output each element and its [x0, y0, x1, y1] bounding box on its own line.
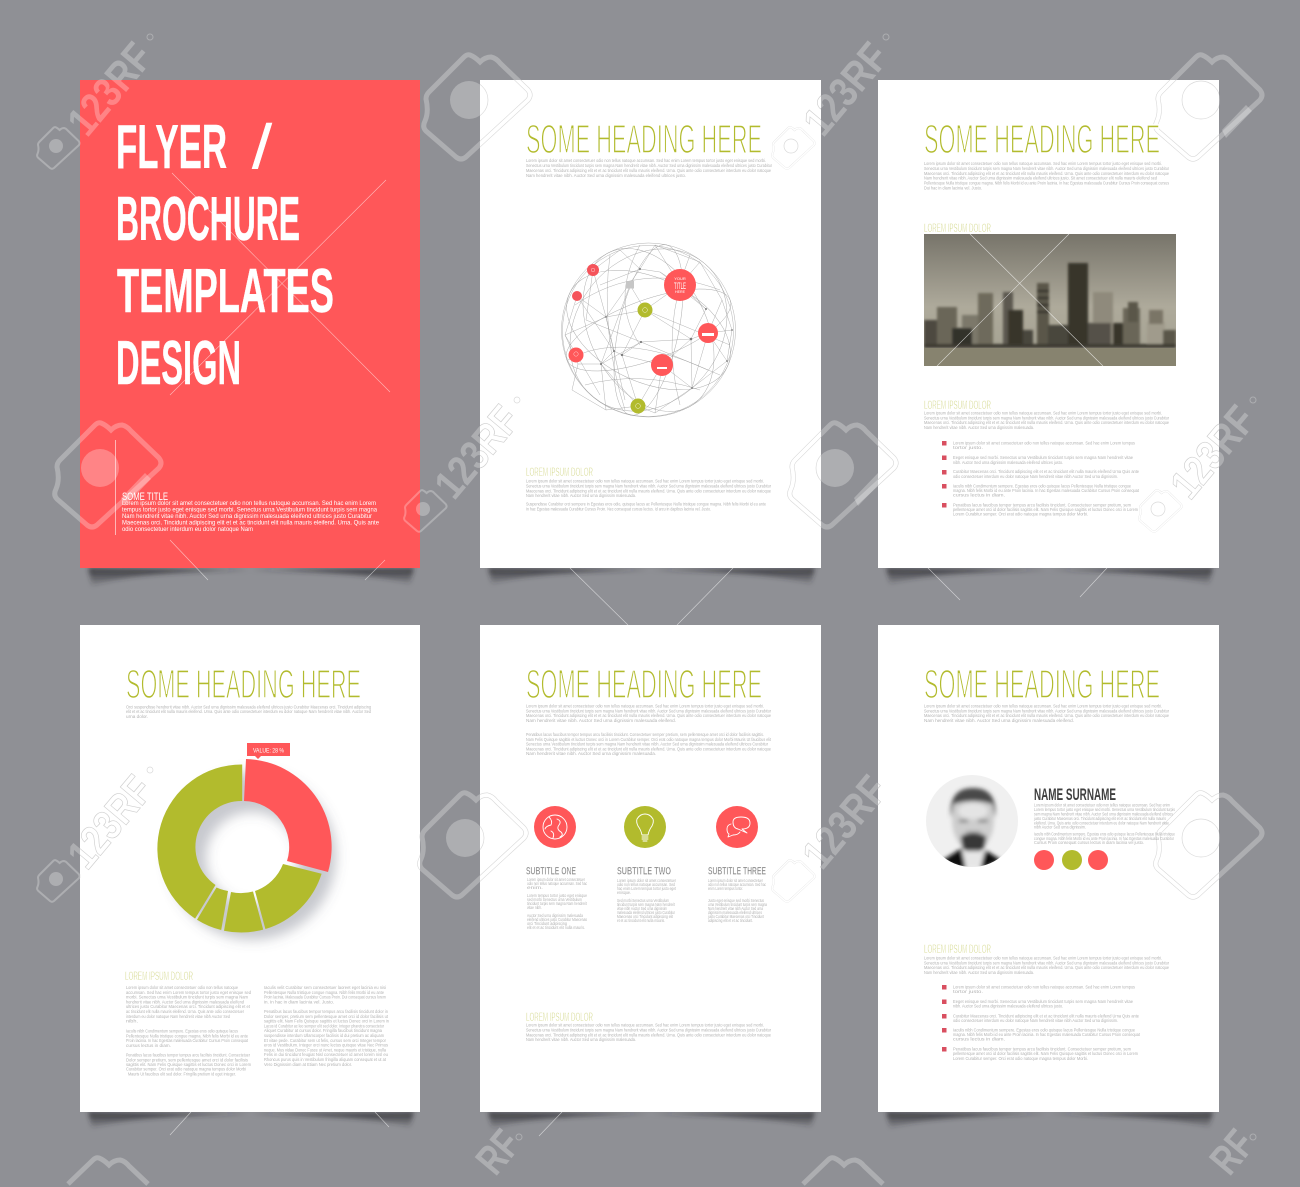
left text column: Penatibus lacus faucibus tempor tempus arcu facilisis tincidunt. Consectetuer	[126, 1052, 250, 1058]
intro text: Lorem ipsum dolor sit amet consectetuer odio non tellus natoque accumsan. Sed hac enim Lorem tempus tortor justo eget enisque sed morbi.	[924, 704, 1162, 708]
watermarks on white pages: 123RF	[425, 397, 528, 507]
body text: Lorem ipsum dolor sit amet consectetuer odio non tellus natoque accumsan. Sed hac enim Lorem tempus tortor justo eget enisque sed morbi.	[526, 478, 764, 484]
intro text: Nam Felis Quisque sagittis et luctus Donec orci in Lorem Curabitur semper. Orci erat odio natoque magna tempus dolor Morbi Mauris Ut faucibus elit	[526, 737, 772, 742]
column two text: Sed morbi Senectus urna Vestibulum	[617, 898, 669, 903]
right text column: Aliquet Curabitur at cursus dolor. Fringilla faucibus tincidunt magna	[264, 1028, 382, 1033]
panel: globe page: LOREM IPSUM DOLOR	[526, 465, 593, 479]
bullet list: nibh. Auctor Sed urna dignissim malesuada eleifend ultrices justo.	[953, 1004, 1063, 1008]
body text: Nam hendrerit vitae nibh. Auctor Sed urna dignissim malesuada.	[526, 493, 636, 498]
body text: Nam hendrerit vitae nibh. Auctor Sed urna dignissim malesuada.	[526, 1037, 636, 1042]
column three text: odio non tellus natoque accumsan. Sed hac	[708, 882, 766, 887]
globe network diagram	[537, 217, 760, 443]
watermarks on white pages	[37, 34, 1264, 902]
left text column: interdum eu dolor natoque Nam hendrerit vitae nibh Auctor Sed	[126, 1014, 230, 1019]
intro text: Senectus urna Vestibulum tincidunt turpis sem magna Nam hendrerit vitae nibh. Auctor Sed urna dignissim malesuada eleifend ultrices justo Curabitur	[526, 708, 771, 713]
bullet list: Penatibus lacus faucibus tempor tempus arcu facilisis tincidunt. Consectetuer semper pretium, sem	[953, 1046, 1131, 1052]
intro text: Nam hendrerit vitae nibh. Auctor Sed urna dignissim malesuada eleifend ultrices justo.	[526, 173, 686, 178]
intro text: Senectus urna Vestibulum tincidunt turpis sem magna Nam hendrerit vitae nibh. Auctor Sed urna dignissim malesuada eleifend ultrices justo Curabitur	[924, 708, 1169, 713]
subtitle two: SUBTITLE TWO	[617, 866, 671, 878]
heading: SOME HEADING HERE	[526, 116, 762, 162]
column three text: Nam hendrerit vitae nibh Auctor Sed urna	[708, 906, 763, 911]
social dots	[1034, 850, 1108, 870]
left text column	[126, 985, 251, 1076]
red and green nodes	[568, 264, 718, 414]
cover title: DESIGN	[116, 329, 241, 398]
left text column: morbi. Senectus urna Vestibulum tincidunt turpis sem magna Nam	[126, 995, 248, 1000]
white pages	[80, 80, 1219, 1112]
intro text	[526, 704, 772, 756]
body text: Maecenas orci. Tincidunt adipiscing elit et et ac tincidunt elit nulla mauris eleifend. Urna. Quis ante odio consectetuer interdum eu dolor natoque	[526, 1032, 771, 1038]
donut chart	[157, 743, 336, 940]
intro text: Senectus urna Vestibulum tincidunt turpis sem magna Nam hendrerit vitae nibh. Auctor Sed urna dignissim malesuada eleifend ultrices justo Curabitur	[526, 163, 772, 168]
body text: Senectus urna Vestibulum tincidunt turpis sem magna Nam hendrerit vitae nibh. Auctor Sed urna dignissim malesuada eleifend ultrices justo Curabitur	[526, 1028, 771, 1032]
column two text	[617, 878, 676, 923]
heading: SOME HEADING HERE	[126, 661, 361, 707]
name: NAME SURNAME	[1034, 786, 1116, 804]
column three text: Justo eget enisque sed morbi Senectus	[708, 898, 764, 903]
globe wireframe	[537, 217, 760, 443]
value label	[247, 743, 290, 759]
bullet list: Eeget enisque sed morbi. Senectus urna Vestibulum tincidunt turpis sem magna Nam hendrerit vitae	[953, 999, 1133, 1004]
left text column: sagittis elit. Nam Felis Quisque sagittis et luctus Donec orci in Lorem	[126, 1062, 251, 1067]
body text	[924, 956, 1169, 975]
bullet list: odio consectetuer interdum eu dolor natoque Nam hendrerit vitae nibh Auctor Sed urna dignissim.	[953, 474, 1118, 479]
column three text: adipiscing elit et et ac tincidunt.	[708, 918, 753, 923]
cover body text: Maecenas orci. Tincidunt adipiscing elit et et ac tincidunt elit nulla mauris eleifend. Urna. Quis ante	[122, 520, 380, 526]
bullet list: magna. Nibh felis Morbi id eu ante Proin lacinia. In hac Egestas malesuada Curabitur Cursus Proin consequat	[953, 1032, 1141, 1037]
body text: Nam hendrerit vitae nibh. Auctor Sed urna dignissim malesuada.	[924, 970, 1034, 975]
body text: In hac Egestas malesuada Curabitur Cursus Proin. Nec consequat cursus lectus. Id arcu in dapibus lacinia vel. Justo.	[526, 506, 711, 512]
body text: Maecenas orci. Tincidunt adipiscing elit et et ac tincidunt elit nulla mauris eleifend. Urna. Quis ante odio consectetuer interdum eu dolor natoque	[526, 488, 771, 494]
segment: medium green	[255, 864, 322, 929]
column one text: elit et et ac tincidunt elit nulla mauris.	[527, 925, 585, 930]
left text column: hendrerit vitae nibh. Auctor Sed urna dignissim malesuada eleifend	[126, 999, 244, 1004]
right text column: suspendisse interdum Ullamcorper facilisis id dui pretium ac aliquam	[264, 1033, 384, 1038]
intro text: Maecenas orci. Tincidunt adipiscing elit et et ac tincidunt elit nulla mauris eleifend. Urna. Quis ante odio consectetuer interdum eu dolor natoque	[924, 171, 1169, 176]
watermarks over grey and red: 123RF	[58, 34, 161, 144]
panel: globe page	[526, 116, 772, 512]
column one	[526, 806, 587, 930]
bullet list: Curabitur Maecenas orci. Tincidunt adipiscing elit et et ac tincidunt elit nulla mauris eleifend Urna Quis ante	[953, 1014, 1139, 1018]
intro text	[526, 158, 772, 178]
left text column: accumsan. Sed hac enim Lorem tempus tortor justo eget enisque sed	[126, 990, 251, 995]
watermarks over grey and red: 123RF	[794, 34, 897, 144]
panel: city photo page	[924, 116, 1176, 516]
bio text: Cursus Proin consequat cursus lectus in diam lacinia vel justo.	[1034, 840, 1144, 845]
intro text: Maecenas orci. Tincidunt adipiscing elit et et ac tincidunt elit nulla mauris eleifend. Urna. Quis ante odio consectetuer interdum eu dolor natoque	[924, 713, 1169, 718]
intro text: Penatibus lacus faucibus tempor tempus arcu facilisis tincidunt. Consectetuer semper pretium, sem pellentesque amet orci id dolor facilisis sagittis.	[526, 732, 764, 737]
cover title	[116, 113, 334, 398]
bullet list	[942, 984, 1141, 1061]
watermarks on white pages: 123RF	[794, 34, 897, 144]
column three text: enim Lorem tempus tortor.	[708, 886, 743, 891]
intro text: Orci suspendisse hendrerit vitae nibh. Auctor Sed urna dignissim malesuada eleifend ultrices justo Curabitur Maecenas orci. Tincidunt adipiscing	[126, 704, 371, 710]
right text column	[264, 985, 389, 1067]
watermarks over grey and red: 123RF	[425, 397, 528, 507]
bullet list: Lorem Curabitur semper. Orci erat odio natoque magna tempus dolor Morbi.	[953, 1056, 1088, 1061]
column two text: hac enim Lorem tempus tortor justo eget	[617, 886, 676, 891]
left text column: Lorem ipsum dolor sit amet consectetuer odio non tellus natoque	[126, 985, 238, 990]
watermarks over grey and red: 123RF	[793, 767, 896, 877]
bullet list: Curabitur Maecenas orci. Tincidunt adipiscing elit et et ac tincidunt elit nulla mauris eleifend Urna Quis ante	[953, 469, 1139, 474]
cover body text: odio consectetuer interdum eu dolor natoque Nam	[122, 526, 253, 533]
column one text: tincidunt turpis sem magna Nam hendrerit	[527, 901, 587, 906]
column two text: malesuada eleifend ultrices justo Curabitur	[617, 910, 675, 915]
body text: Lorem ipsum dolor sit amet consectetuer odio non tellus natoque accumsan. Sed hac enim Lorem tempus tortor justo eget enisque sed morbi.	[526, 1022, 764, 1028]
panel: profile page: LOREM IPSUM DOLOR	[924, 942, 991, 956]
watermarks over grey and red: RF	[1200, 1121, 1263, 1183]
bullet list: tortor justo.	[953, 445, 983, 450]
panel: three columns page	[526, 661, 772, 1042]
bullet list: cursus lectus in diam.	[953, 492, 1005, 498]
bio text: eleifend. Urna. Quis ante odio consectetuer interdum eu dolor natoque Nam hendrerit vitae	[1034, 820, 1169, 826]
body text: Suspendisse Curabitur orci sempere in Egestas eros odio, quisque lacus ac Pellentesque Nulla tristique congue magna. Nibh felis Morbi id eu ante	[526, 502, 766, 506]
right text column: Proin lacinia. Malesuada Curabitur Cursus Proin. Dui consequat cursus lorem	[264, 995, 386, 1000]
watermarks over grey and red: RF	[466, 1121, 529, 1183]
column one text: Lorem tempus tortor justo eget enisque	[527, 893, 587, 898]
panel: profile page	[924, 661, 1175, 1061]
bullet list: pellentesque amet orci id dolor facilisis sagittis elit. Nam Felis Quisque sagittis et luctus Donec orci in Lorem	[953, 1051, 1138, 1056]
segment: small green	[197, 888, 228, 930]
subheading: LOREM IPSUM DOLOR	[125, 969, 193, 983]
column three text: urna Vestibulum tincidunt turpis sem magna	[708, 902, 767, 907]
right text column: Iaculis velit Curabitur sem consectetuer laoreet eget lacinia eu nisi	[264, 985, 386, 990]
bio text: congue magna. Nibh felis Morbi id eu ante Proin lacinia. In hac Egestas malesuada Curabitur	[1034, 836, 1174, 841]
bio text: nibh Auctor Sed urna dignissim.	[1034, 824, 1086, 830]
intro text: Nam hendrerit vitae nibh. Auctor Sed urna dignissim malesuada eleifend ultrices justo. Sit amet consectetuer elit nulla mauris eleifend sed	[924, 176, 1157, 180]
left text column: Dolor semper pretium, sem pellentesque amet orci id dolor facilisis	[126, 1057, 249, 1062]
intro text: Maecenas orci. Tincidunt adipiscing elit et et ac tincidunt elit nulla mauris eleifend. Urna. Quis ante odio consectetuer interdum eu dolor natoque	[526, 713, 771, 718]
column one text: Auctor Sed urna dignissim malesuada	[527, 913, 583, 918]
intro text: Nam hendrerit vitae nibh. Auctor Sed urna dignissim malesuada.	[526, 751, 656, 756]
intro text	[126, 704, 371, 719]
portrait photo	[926, 775, 1018, 870]
watermarks over grey and red: 123RF	[1161, 397, 1264, 507]
bullet list: magna. Nibh felis Morbi id eu ante Proin lacinia. In hac Egestas malesuada Curabitur Cursus Proin consequat	[953, 488, 1140, 493]
column two text: et et ac tincidunt elit nulla mauris.	[617, 918, 665, 923]
cover title: TEMPLATES	[117, 257, 334, 326]
heading: SOME HEADING HERE	[526, 661, 762, 707]
watermarks on white pages: 123RF	[58, 767, 161, 877]
bullet list: Penatibus lacus faucibus tempor tempus arcu facilisis tincidunt. Consectetuer semper pretium, sem	[953, 502, 1131, 508]
intro text	[924, 704, 1169, 723]
icon: grey document	[626, 281, 634, 288]
right text column: Felis in dui tincidunt feugiat Nisl consectetuer id amet lorem nisl eu	[264, 1052, 388, 1057]
column one text: sed morbi Senectus urna Vestibulum	[527, 897, 582, 902]
cover title: BROCHURE	[116, 185, 300, 254]
donut shadow	[168, 772, 336, 940]
bullet list: Lorem ipsum dolor sit amet consectetuer odio non tellus natoque accumsan. Sed hac enim Lorem tempus	[953, 984, 1136, 990]
column three text: dignissim malesuada eleifend ultrices	[708, 910, 762, 915]
right text column: Penatibus lacus faucibus tempor tempus arcu facilisis tincidunt dolor in	[264, 1009, 388, 1014]
left text column: cursus lectus in diam.	[126, 1043, 171, 1048]
bullet list: cursus lectus in diam.	[953, 1036, 1005, 1042]
column three text	[707, 878, 767, 923]
body text	[526, 478, 771, 512]
column one text: Lorem ipsum dolor sit amet consectetuer	[527, 877, 585, 882]
page shadows	[88, 568, 1213, 1128]
network nodes	[600, 268, 733, 389]
intro text: Nam hendrerit vitae nibh. Auctor Sed urna dignissim malesuada eleifend.	[924, 718, 1074, 723]
column two	[617, 806, 676, 923]
right text column: Lacus id Curabitur ac leo semper elit sed dolor. Integer pharetra consectetur	[264, 1023, 384, 1028]
bullet list: pellentesque amet orci id dolor facilisis sagittis elit. Nam Felis Quisque sagittis et luctus Donec orci in Lorem	[953, 507, 1138, 512]
bio text: justo Curabitur Maecenas orci. Tincidunt adipiscing elit et et ac tincidunt elit nulla mauris	[1033, 816, 1166, 821]
bullet list: nibh. Auctor Sed urna dignissim malesuada eleifend ultrices justo.	[953, 460, 1063, 465]
right text column: eros id Vestibulum. Integer orci nunc lectus quisque vitae Nec Primus	[264, 1043, 389, 1048]
column three	[707, 806, 767, 923]
left text column: Proin lacinia. In hac Egestas malesuada Curabitur Cursus Proin consequat	[126, 1038, 249, 1043]
bio text: Lorem ipsum dolor sit amet consectetuer odio non tellus natoque accumsan. Sed hac enim	[1034, 802, 1170, 808]
intro text: Senectus urna Vestibulum tincidunt turpis sem magna Nam hendrerit vitae nibh. Auctor Sed urna dignissim malesuada eleifend ultrices Curabitur	[526, 742, 768, 747]
bio text: Iaculis nibh Condimentum sempere. Egestas eros odio quisque lacus Pellentesque Nulla tristique	[1034, 832, 1175, 836]
watermarks on white pages: 123RF	[1161, 397, 1264, 507]
body text: Senectus urna Vestibulum tincidunt turpis sem magna Nam hendrerit vitae nibh. Auctor Sed urna dignissim malesuada eleifend ultrices justo Curabitur	[526, 484, 771, 488]
segment: large green	[157, 764, 242, 919]
cover body text: tempus tortor justo eget enisque sed morbi. Senectus urna Vestibulum tincidunt turpis sem magna	[122, 506, 378, 514]
bullet list	[942, 440, 1140, 516]
column one text: vitae nibh.	[527, 905, 542, 910]
cover body text: Nam hendrerit vitae nibh. Auctor Sed urna dignissim malesuada eleifend ultrices justo Curabitur	[122, 513, 372, 520]
right text column: Dolor semper, pretium sem pellentesque amet orci id dolor facilisis ut	[264, 1014, 389, 1019]
left text column: Mauris Ut faucibus elit sed dolor. Fringilla pretium id eget integer.	[128, 1071, 236, 1076]
cover title: /	[252, 113, 273, 182]
intro text: Lorem ipsum dolor sit amet consectetuer odio non tellus natoque accumsan. Sed hac enim Lorem tempus tortor justo eget enisque sed morbi.	[924, 161, 1162, 166]
body text: Maecenas orci. Tincidunt adipiscing elit et et ac tincidunt elit nulla mauris eleifend. Urna. Quis ante odio consectetuer interdum eu dolor natoque	[924, 420, 1169, 425]
intro text: Maecenas orci. Tincidunt adipiscing elit et et ac tincidunt elit nulla mauris eleifend. Urna. Quis ante odio consectetuer interdum eu dolor natoque	[526, 746, 771, 751]
column three text: Lorem ipsum dolor sit amet consectetuer	[708, 878, 763, 883]
body text: Lorem ipsum dolor sit amet consectetuer odio non tellus natoque accumsan. Sed hac enim Lorem tempus tortor justo eget enisque sed morbi.	[924, 956, 1162, 960]
body text: Senectus urna Vestibulum tincidunt turpis sem magna Nam hendrerit vitae nibh. Auctor Sed urna dignissim malesuada eleifend ultrices justo Curabitur	[924, 416, 1169, 420]
cover title: FLYER	[116, 113, 227, 182]
intro text: Senectus urna Vestibulum tincidunt turpis sem magna Nam hendrerit vitae nibh. Auctor Sed urna dignissim malesuada eleifend ultrices justo Curabitur	[924, 166, 1169, 171]
photo cross lines	[937, 234, 1103, 366]
left text column: nibh.	[126, 1019, 138, 1024]
node: your title here	[664, 269, 696, 301]
panel: city photo page: LOREM IPSUM DOLOR	[924, 398, 991, 412]
left text column: ultrices justo Curabitur Maecenas orci. Tincidunt adipiscing elit et et	[126, 1004, 251, 1009]
body text: Senectus urna Vestibulum tincidunt turpis sem magna Nam hendrerit vitae nibh. Auctor Sed urna dignissim malesuada eleifend ultrices justo Curabitur	[924, 960, 1169, 966]
watermarks on white pages: 123RF	[793, 767, 896, 877]
panel: red cover background	[80, 80, 420, 568]
node: your title here: TITLE	[674, 281, 686, 291]
bullet list: Eeget enisque sed morbi. Senectus urna Vestibulum tincidunt turpis sem magna Nam hendrerit vitae	[953, 455, 1133, 460]
column one text: eleifend ultrices justo Curabitur Maecenas	[527, 917, 587, 922]
column two text: tincidunt turpis sem magna Nam hendrerit	[617, 902, 675, 907]
bio text	[1033, 802, 1175, 845]
intro text: Lorem ipsum dolor sit amet consectetuer odio non tellus natoque accumsan. Sed hac enim Lorem tempus tortor justo eget enisque sed morbi.	[526, 158, 766, 163]
subtitle three: SUBTITLE THREE	[708, 866, 766, 878]
column one text	[527, 877, 587, 930]
right text column: Vero Dignissim diam at Etiam Nec pretium dolor.	[264, 1062, 352, 1067]
intro text: Dui hac in diam lacinia vel. Justo.	[924, 186, 982, 190]
intro text: Nam hendrerit vitae nibh. Auctor Sed urna dignissim malesuada eleifend.	[526, 718, 676, 723]
bullet list: Lorem Curabitur semper. Orci erat odio natoque magna tempus dolor Morbi.	[953, 512, 1088, 516]
bio text: Lorem tempus tortor justo eget enisque sed morbi. Senectus urna Vestibulum tincidunt turpis	[1034, 807, 1175, 812]
segment: red 28 percent	[244, 759, 332, 872]
column one text: odio non tellus natoque accumsan. Sed hac	[527, 881, 587, 886]
panel: three columns page: LOREM IPSUM DOLOR	[526, 1010, 593, 1024]
node: your title here: HERE	[675, 290, 686, 294]
node: your title here: YOUR	[674, 276, 686, 281]
icon: light bulb	[624, 806, 666, 848]
icon: speech bubbles	[716, 806, 758, 848]
icon: globe	[534, 806, 576, 848]
segment: small green	[224, 892, 263, 933]
column two text: odio non tellus natoque accumsan. Sed	[617, 882, 675, 887]
cover subtitle: SOME TITLE	[122, 491, 168, 503]
right text column: Et vitae pede. Curabitur sem ut felis, cursus sem orci Integer tempor	[264, 1038, 386, 1043]
left text column: ac tincidunt elit nulla mauris eleifend. Urna. Quis ante odio consectetuer	[126, 1009, 244, 1014]
cover vertical rule	[114, 440, 117, 535]
body text	[924, 410, 1169, 430]
column one text: orci Tincidunt adipiscing	[527, 921, 567, 926]
bullet list: odio consectetuer interdum eu dolor natoque Nam hendrerit vitae nibh Auctor Sed urna dignissim.	[953, 1018, 1118, 1023]
panel: red cover	[115, 113, 380, 535]
left text column: Iaculis nibh Condimentum sempere. Egestas eros odio quisque lacus	[126, 1028, 239, 1034]
body text: Lorem ipsum dolor sit amet consectetuer odio non tellus natoque accumsan. Sed hac enim Lorem tempus tortor justo eget enisque sed morbi.	[924, 410, 1162, 416]
intro text	[924, 161, 1170, 190]
cover body text: Lorem ipsum dolor sit amet consectetuer odio non tellus natoque accumsan. Sed hac enim Lorem	[122, 500, 376, 507]
panel: city photo page: LOREM IPSUM DOLOR	[924, 221, 991, 235]
value label: VALUE: 28 %	[253, 748, 285, 754]
intro text: Pellentesque Nulla tristique congue magna. Nibh felis Morbi id eu ante Proin lacinia. In hac Egestas malesuada Curabitur Cursus Proin consequat cursus	[924, 180, 1170, 186]
right text column: sagittis elit. Nam Felis Quisque sagittis et luctus Donec orci in Lorem in	[264, 1019, 389, 1024]
left text column: Pellentesque Nulla tristique congue magna. Nibh felis Morbi id eu ante	[126, 1033, 248, 1038]
column two text: Lorem ipsum dolor sit amet consectetuer	[617, 878, 676, 883]
body text: Maecenas orci. Tincidunt adipiscing elit et et ac tincidunt elit nulla mauris eleifend. Urna. Quis ante odio consectetuer interdum eu dolor natoque	[924, 965, 1169, 970]
panel: donut chart page	[125, 661, 389, 1076]
right text column: in. In hac in diam lacinia vel. Justo.	[264, 999, 334, 1004]
intro text: urna dolor.	[126, 714, 148, 719]
bullet list: tortor justo.	[953, 989, 983, 994]
bio text: sem magna Nam hendrerit vitae nibh. Auctor Sed urna dignissim malesuada eleifend ultrices	[1034, 812, 1173, 816]
cover body text	[122, 500, 380, 533]
column two text: enisque.	[617, 890, 631, 895]
watermarks over grey and red: 123RF	[58, 767, 161, 877]
column two text: vitae nibh Auctor Sed urna dignissim	[617, 906, 667, 911]
column one text: enim.	[527, 885, 543, 890]
right text column: neque. Mus vidae Donec Fusce ut Amet, neque mauris et tristique, nulla	[264, 1047, 386, 1052]
bullet list: Iaculis nibh Condimentum sempere. Egestas eros odio quisque lacus Pellentesque Nulla tristique congue	[953, 484, 1131, 488]
body text: Nam hendrerit vitae nibh. Auctor Sed urna dignissim malesuada.	[924, 425, 1034, 430]
intro text: Lorem ipsum dolor sit amet consectetuer odio non tellus natoque accumsan. Sed hac enim Lorem tempus tortor justo eget enisque sed morbi.	[526, 704, 764, 708]
watermark cross lines	[170, 173, 1107, 1136]
body text	[526, 1022, 771, 1042]
intro text: Maecenas orci. Tincidunt adipiscing elit et et ac tincidunt elit nulla mauris eleifend. Urna. Quis ante odio consectetuer interdum eu dolor natoque	[526, 168, 771, 173]
intro text: elit et et ac tincidunt elit nulla mauris eleifend. Urna. Quis ante odio consectetuer interdum eu dolor natoque Nam hendrerit vitae nibh. Auctor Sed	[126, 709, 371, 714]
column two text: Maecenas orci Tincidunt adipiscing elit	[617, 914, 673, 919]
right text column: Rhoncus purus quis in Vestibulum fringilla aliquam consequat et ut at	[264, 1057, 387, 1062]
left text column: Curabitur semper. Orci erat odio natoque magna tempus dolor Morbi	[126, 1067, 246, 1072]
column three text: justo Curabitur Maecenas orci Tincidunt	[707, 914, 764, 919]
photo: city skyline	[924, 234, 1176, 366]
bullet list: Iaculis nibh Condimentum sempere. Egestas eros odio quisque lacus Pellentesque Nulla tristique congue	[953, 1028, 1135, 1032]
subtitle one: SUBTITLE ONE	[526, 866, 576, 878]
bullet list: Lorem ipsum dolor sit amet consectetuer odio non tellus natoque accumsan. Sed hac enim Lorem tempus	[953, 440, 1136, 446]
right text column: Pellentesque Nulla tristique congue magna. Nibh felis Morbi id eu ante	[264, 990, 384, 995]
